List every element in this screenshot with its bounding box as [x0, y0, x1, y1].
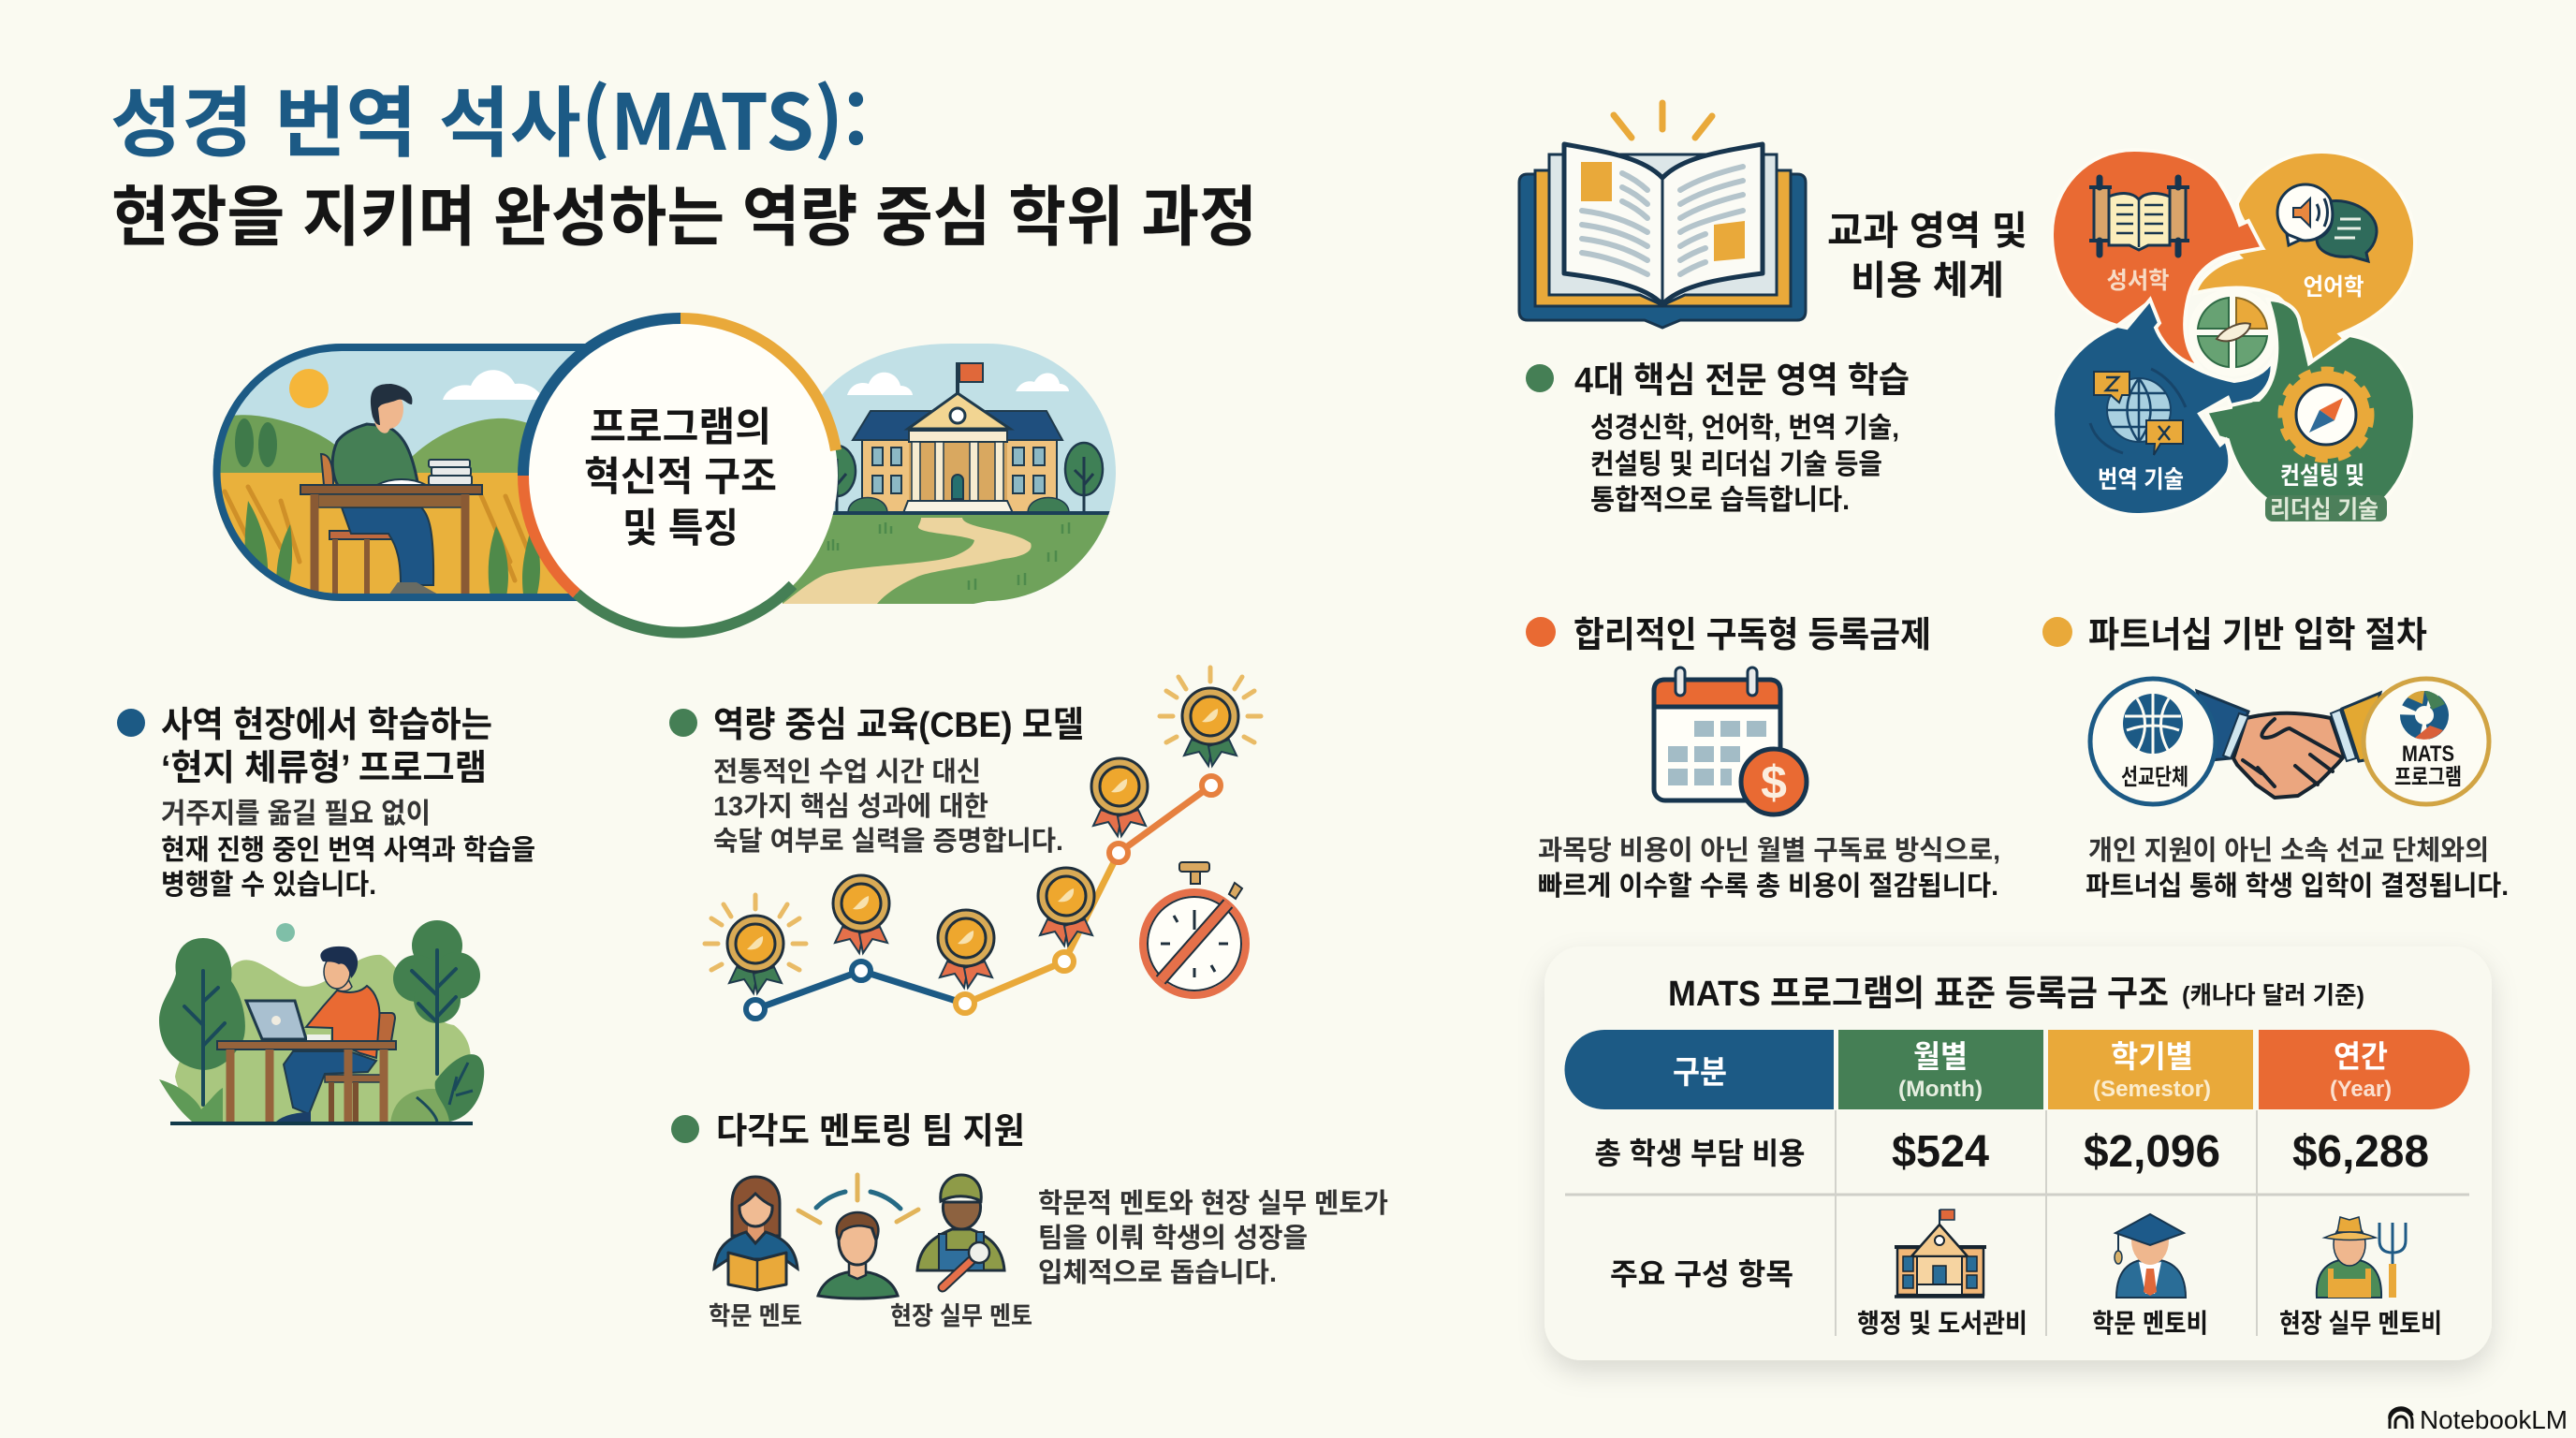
row: total student cost: $2,096	[2084, 1127, 2220, 1177]
panel: tuition table	[1544, 946, 2492, 1360]
body	[1590, 413, 1899, 516]
section: partnership admission	[2042, 616, 2509, 902]
section: mentoring team	[671, 1112, 1388, 1330]
body: 컨설팅 및 리더십 기술 등을	[1590, 449, 1882, 480]
label: 번역 기술	[2098, 465, 2184, 493]
header: category: 구분	[1673, 1055, 1727, 1091]
heading: curriculum and cost: 비용 체계	[1851, 258, 2004, 302]
illustration: student with laptop outdoors	[159, 920, 484, 1123]
body	[1038, 1188, 1388, 1288]
body: 개인 지원이 아닌 소속 선교 단체와의	[2088, 835, 2489, 866]
section: four core areas	[1526, 361, 1910, 516]
segment: language	[2195, 152, 2415, 363]
body: 팀을 이뤄 학생의 성장을	[1038, 1223, 1308, 1254]
body	[2086, 835, 2509, 902]
header: category	[1565, 1030, 1834, 1109]
body: 입체적으로 돕습니다.	[1038, 1257, 1277, 1288]
body: 성경신학, 언어학, 번역 기술,	[1590, 413, 1899, 444]
body: 과목당 비용이 아닌 월별 구독료 방식으로,	[1538, 835, 2000, 866]
icons: mentors	[714, 1175, 1004, 1299]
header: annual	[2259, 1030, 2469, 1109]
heading: ‘현지 체류형’ 프로그램	[161, 749, 487, 788]
connector rays	[798, 1175, 918, 1223]
label: 현장 실무 멘토비	[2279, 1309, 2442, 1338]
heading: 다각도 멘토링 팀 지원	[716, 1112, 1025, 1152]
label: field mentor: 현장 실무 멘토	[890, 1302, 1032, 1330]
body: 전통적인 수업 시간 대신	[713, 756, 981, 787]
left scene: field study	[213, 344, 585, 601]
center circle	[523, 318, 838, 633]
table title: MATS 프로그램의 표준 등록금 구조	[1668, 975, 2169, 1014]
center label	[584, 405, 777, 551]
icon: crossed-out stopwatch	[1140, 862, 1249, 998]
header: semester: (Semestor)	[2093, 1077, 2211, 1102]
title line 1: 성경 번역 석사(MATS):	[110, 61, 869, 172]
body: 파트너십 통해 학생 입학이 결정됩니다.	[2086, 871, 2509, 902]
icon: graduate	[2115, 1214, 2186, 1298]
bullet	[669, 709, 697, 737]
heading	[161, 706, 492, 788]
heading: 사역 현장에서 학습하는	[161, 706, 492, 745]
right scene: campus building	[777, 344, 1123, 607]
row: total student cost: 총 학생 부담 비용	[1595, 1137, 1805, 1170]
label: 행정 및 도서관비	[1857, 1309, 2027, 1338]
bullet	[1526, 617, 1556, 647]
section: CBE model	[669, 668, 1261, 1019]
section: field-embedded program	[117, 706, 535, 1123]
mission organization circle: 선교단체	[2121, 765, 2188, 790]
body	[713, 756, 1063, 857]
hero: program structure	[213, 318, 1123, 633]
label: 성서학	[2106, 268, 2170, 294]
title line 2: 현장을 지키며 완성하는 역량 중심 학위 과정	[111, 181, 1257, 254]
row: main components: 주요 구성 항목	[1610, 1257, 1793, 1291]
header: semester: 학기별	[2111, 1039, 2193, 1074]
heading: curriculum and cost	[1827, 209, 2027, 302]
heading: 역량 중심 교육(CBE) 모델	[713, 706, 1084, 745]
title	[110, 61, 1257, 254]
row: total student cost: $524	[1892, 1127, 1989, 1177]
label pill: 리더십 기술	[2270, 495, 2378, 523]
header: monthly: 월별	[1913, 1039, 1968, 1074]
segment: bible studies	[2052, 150, 2262, 367]
body: 13가지 핵심 성과에 대한	[713, 791, 988, 822]
heading: 파트너십 기반 입학 절차	[2088, 616, 2427, 655]
heading: curriculum and cost: 교과 영역 및	[1827, 209, 2027, 253]
NotebookLM logo: NotebookLM	[2420, 1405, 2568, 1434]
bullet	[1526, 364, 1554, 392]
center hub	[2188, 288, 2276, 376]
body: 현재 진행 중인 번역 사역과 학습을	[161, 835, 535, 866]
bullet	[117, 709, 145, 737]
mission organization circle	[2090, 679, 2216, 804]
body	[1538, 835, 2000, 902]
heading: 4대 핵심 전문 영역 학습	[1574, 361, 1910, 401]
diagram: four study areas	[2052, 150, 2415, 523]
segment: translation	[2053, 300, 2273, 515]
row: total student cost	[1595, 1127, 2429, 1177]
bullet	[671, 1115, 699, 1143]
table title: (캐나다 달러 기준)	[2182, 981, 2364, 1009]
chart: progress line with medals	[705, 668, 1261, 1019]
segment: consulting and leadership	[2206, 300, 2415, 523]
sleeves and hands	[2197, 691, 2380, 798]
section: subscription tuition	[1526, 616, 2000, 902]
icon: admin building	[1895, 1210, 1986, 1297]
MATS program circle	[2364, 679, 2489, 804]
icon: academic mentor	[714, 1177, 798, 1290]
icon: calendar with dollar coin	[1654, 668, 1807, 814]
handshake diagram	[2090, 679, 2489, 804]
bullet	[2042, 617, 2072, 647]
icon: field mentor	[917, 1175, 1004, 1287]
center label: 혁신적 구조	[584, 455, 777, 500]
label: 언어학	[2303, 274, 2364, 301]
label: 컨설팅 및	[2280, 462, 2364, 490]
label: academic mentor: 학문 멘토	[709, 1302, 802, 1330]
body: 거주지를 옮길 필요 없이	[161, 799, 431, 829]
center label: 및 특징	[622, 506, 739, 551]
body: 통합적으로 습득합니다.	[1590, 485, 1850, 516]
body: 숙달 여부로 실력을 증명합니다.	[713, 826, 1063, 857]
header: monthly	[1838, 1030, 2043, 1109]
MATS program circle: 프로그램	[2394, 765, 2462, 790]
icon: open book	[1519, 103, 1806, 328]
body: 병행할 수 있습니다.	[161, 870, 376, 901]
heading: 합리적인 구독형 등록금제	[1573, 616, 1931, 655]
icon: field worker	[2317, 1217, 2406, 1298]
label: 학문 멘토비	[2092, 1309, 2208, 1338]
center label: 프로그램의	[590, 405, 771, 450]
MATS program circle: MATS	[2402, 741, 2454, 767]
header: semester	[2048, 1030, 2253, 1109]
header row	[1565, 1030, 2469, 1109]
row: total student cost: $6,288	[2292, 1127, 2429, 1177]
body: 빠르게 이수할 수록 총 비용이 절감됩니다.	[1538, 871, 1998, 902]
header: monthly: (Month)	[1898, 1077, 1983, 1102]
header: annual: 연간	[2334, 1039, 2388, 1074]
icon: calendar with dollar coin: $	[1761, 756, 1787, 809]
icon: student	[818, 1212, 898, 1299]
body	[161, 799, 535, 901]
header: annual: (Year)	[2330, 1077, 2392, 1102]
row: main components	[1610, 1210, 2442, 1338]
body: 학문적 멘토와 현장 실무 멘토가	[1038, 1188, 1388, 1219]
